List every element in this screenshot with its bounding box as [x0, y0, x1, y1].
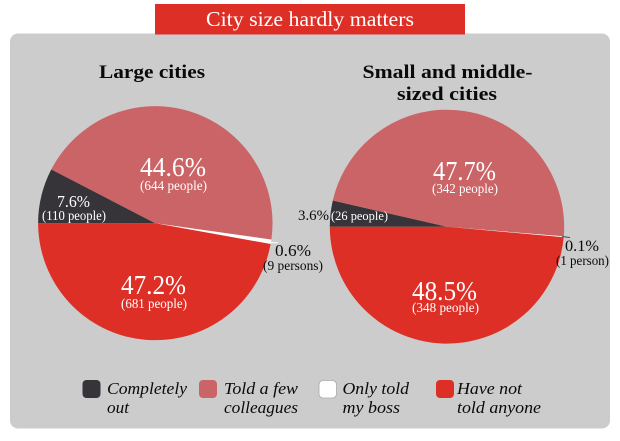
panel: large cities: [38, 62, 323, 340]
leader line: 0.6%: [269, 242, 278, 244]
label: 342 people: (342 people): [432, 182, 498, 197]
legend: [82, 379, 541, 417]
panel: small and middle-sized cities: [298, 62, 609, 344]
legend item: have not told anyone: [436, 379, 541, 417]
label: 47.7%: 47.7%: [433, 156, 496, 186]
legend item: completely out: [82, 379, 187, 417]
label: 48.5%: 48.5%: [412, 276, 477, 306]
legend item: told a few colleagues: colleagues: [224, 398, 298, 417]
legend item: told a few colleagues: Told a few: [224, 379, 299, 398]
leader line: 0.1%: [562, 236, 570, 238]
heading: small and middle-sized cities: sized cities: [397, 84, 497, 105]
label: 44.6%: 44.6%: [140, 152, 206, 182]
label: 681 people: (681 people): [121, 297, 187, 312]
label: 110 people: (110 people): [42, 209, 106, 224]
legend item: told a few colleagues: [199, 379, 299, 417]
legend item: only told my boss: [319, 379, 410, 417]
pie chart: large cities: [38, 106, 273, 340]
title banner: City size hardly matters: [206, 7, 414, 31]
label: 26 people: (26 people): [331, 208, 388, 223]
label: 0.1%: 0.1%: [565, 238, 599, 255]
heading: large cities: Large cities: [99, 62, 205, 83]
label: 644 people: (644 people): [140, 179, 207, 194]
pie chart: small and middle-sized cities: [330, 110, 564, 344]
label: 0.6%: 0.6%: [275, 241, 311, 260]
legend item: have not told anyone: Have not: [456, 379, 523, 398]
label: 3.6%: 3.6%: [298, 208, 329, 224]
label: 348 people: (348 people): [412, 301, 479, 316]
legend item: only told my boss: Only told: [342, 379, 410, 398]
legend item: completely out: out: [107, 398, 130, 417]
heading: small and middle-sized cities: Small and middle-: [362, 62, 532, 83]
label: 1 person: (1 person): [556, 254, 609, 269]
legend item: only told my boss: my boss: [342, 398, 400, 417]
label: 9 persons: (9 persons): [263, 259, 323, 274]
legend item: completely out: Completely: [107, 379, 187, 398]
title banner: [155, 4, 465, 34]
legend item: have not told anyone: told anyone: [457, 398, 541, 417]
label: 7.6%: 7.6%: [57, 192, 90, 211]
label: 47.2%: 47.2%: [121, 270, 186, 300]
